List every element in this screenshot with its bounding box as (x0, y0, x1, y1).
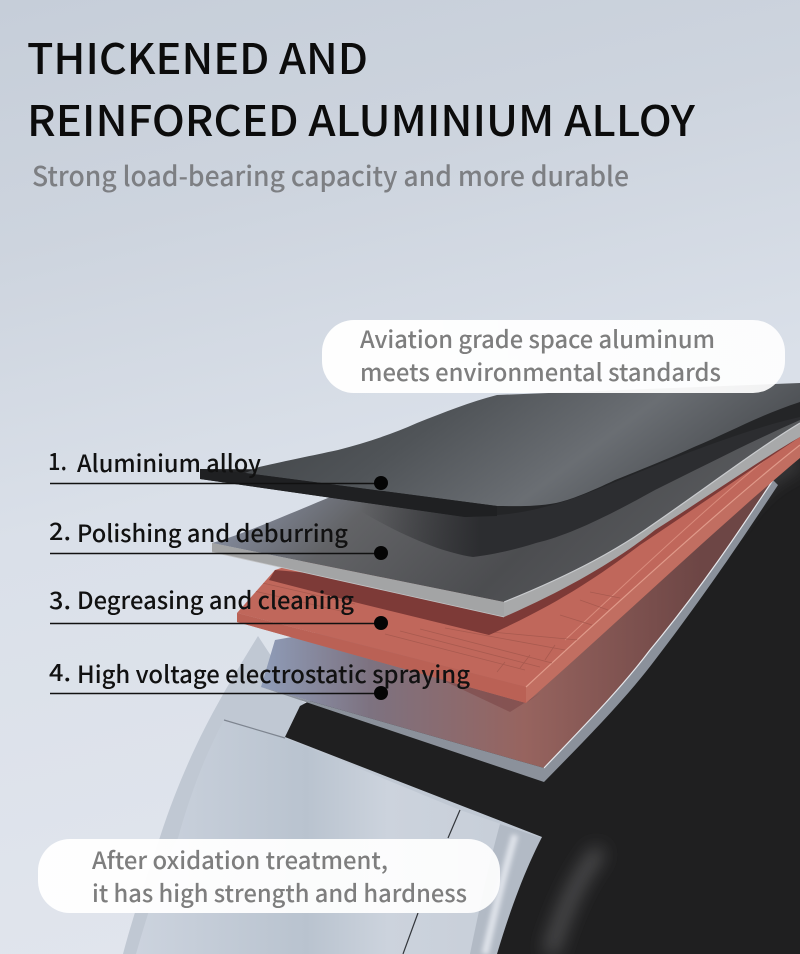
callout: aviation grade (322, 320, 785, 393)
shadow under layer 3 (440, 679, 540, 712)
title: REINFORCED ALUMINIUM ALLOY (27, 88, 696, 149)
label 2: polishing and deburring: Polishing and deburring (77, 514, 348, 549)
callout: oxidation treatment: After oxidation treatment, (92, 841, 388, 876)
callout: aviation grade: Aviation grade space aluminum (360, 320, 715, 355)
shadow under layer 1 (350, 400, 800, 557)
label 3: degreasing and cleaning: 3. (49, 581, 71, 616)
layer 2: polished grey sheet (212, 400, 800, 617)
title (27, 26, 696, 149)
subtitle: Strong load-bearing capacity and more durable (32, 155, 629, 194)
callout: aviation grade: meets environmental standards (360, 353, 721, 388)
callout: oxidation treatment: it has high strength and hardness (92, 874, 467, 909)
label 1: aluminium alloy (48, 442, 388, 490)
label 1: aluminium alloy: 1. (48, 442, 67, 477)
label 4: high voltage electrostatic spraying: 4. (49, 653, 71, 688)
label 4: high voltage electrostatic spraying: High voltage electrostatic spraying (77, 655, 470, 690)
title: THICKENED AND (27, 26, 368, 87)
layer 4: electrostatic spray (261, 470, 778, 782)
shadow under layer 2 (269, 420, 800, 635)
label 3: degreasing and cleaning: Degreasing and cleaning (77, 581, 354, 616)
label 2: polishing and deburring (49, 512, 388, 560)
label 2: polishing and deburring: 2. (49, 512, 71, 547)
label 1: aluminium alloy: Aluminium alloy (77, 444, 261, 479)
label 3: degreasing and cleaning (49, 581, 388, 630)
layer 1: aluminium alloy sheet (200, 383, 800, 517)
illustration: wheel rim (123, 636, 545, 954)
callout: oxidation treatment (38, 839, 500, 913)
label 4: high voltage electrostatic spraying (49, 653, 470, 700)
layer 3: degreasing red sheet (237, 437, 800, 703)
illustration: black tyre (285, 440, 800, 954)
